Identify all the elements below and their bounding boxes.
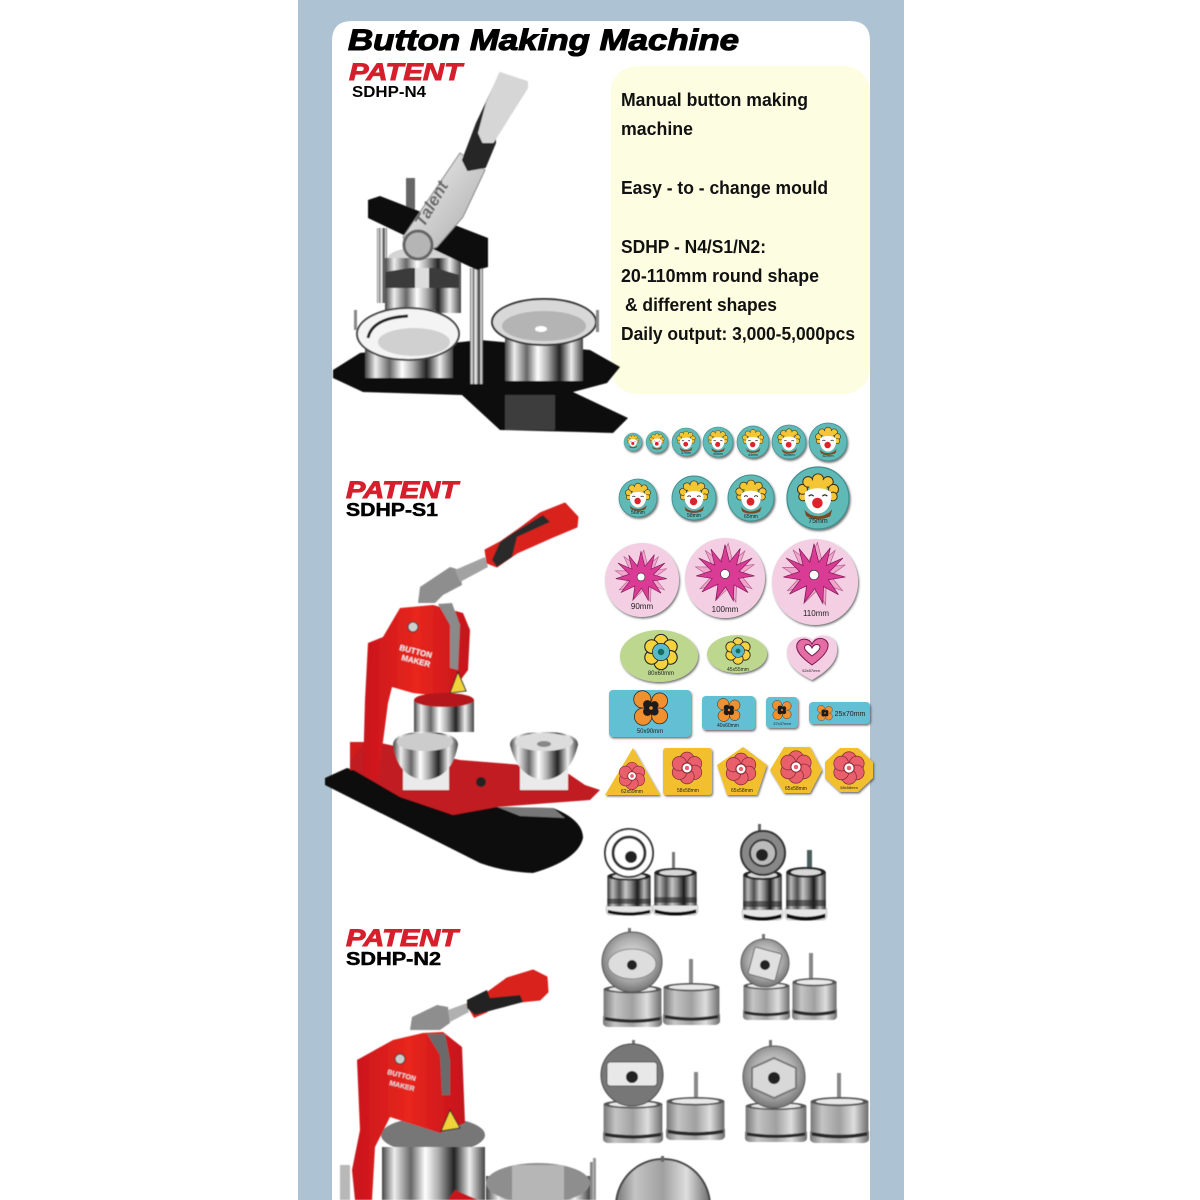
machine: SDHP-N4: [333, 73, 628, 433]
grey arm: [418, 567, 462, 603]
button 100mm: [685, 538, 765, 618]
row: yellow shaped buttons: [605, 747, 873, 795]
button 90mm: [605, 543, 679, 617]
title: Button Making Machine: [348, 24, 739, 57]
right post: [470, 268, 483, 384]
lower mould: [393, 732, 458, 790]
button octagon 58x58mm: [825, 748, 873, 792]
warning triangle: [441, 1110, 460, 1131]
mould set 7 partial: [593, 1156, 710, 1200]
spring screw: [406, 178, 415, 214]
button 90mm: 90mm: [631, 602, 653, 611]
row: rectangle buttons: [609, 690, 870, 737]
button 58mm: 58mm: [687, 513, 701, 519]
body link slot: [438, 603, 460, 670]
brand on arm: Talent: [411, 177, 453, 230]
mould set 1: [605, 829, 698, 915]
button 32mm: [646, 431, 668, 453]
button hexagon 65x58mm: [770, 747, 822, 793]
label: model SDHP-N4: SDHP-N4: [352, 84, 426, 101]
button 25mm: [624, 433, 642, 451]
mould set 3: [602, 928, 720, 1027]
feature: models: SDHP - N4/S1/N2:: [621, 237, 766, 257]
button square 58x58mm: [663, 748, 712, 795]
grey arm: [410, 1005, 450, 1030]
panel: features description: [611, 66, 870, 394]
upper mould: [382, 1147, 485, 1200]
button square 58x58mm: 58x58mm: [677, 788, 699, 794]
button hexagon 65x58mm: 65x58mm: [785, 786, 807, 792]
button 44mm: 44mm: [748, 453, 758, 457]
badge text line 2: MAKER: [389, 1080, 415, 1093]
badge text line 2: MAKER: [401, 653, 431, 669]
button triangle 62x59mm: 62x59mm: [621, 789, 643, 795]
black grip: [463, 85, 495, 170]
label: patent N4: PATENT: [349, 59, 465, 86]
button 80x60mm: [620, 630, 698, 682]
right mould bowl: [492, 299, 599, 381]
button 44mm: [737, 426, 769, 458]
button 75mm: 75mm: [808, 518, 828, 525]
grip: [485, 503, 578, 567]
label: model SDHP-N2: SDHP-N2: [346, 949, 441, 969]
mould set 2: [741, 824, 827, 921]
button 40mm: [703, 427, 733, 457]
feature: output: Daily output: 3,000-5,000pcs: [621, 324, 855, 344]
warning triangle: [450, 672, 466, 693]
button octagon 58x58mm: 58x58mm: [840, 785, 858, 790]
button 40x60mm: 40x60mm: [717, 723, 739, 729]
button 40x60mm: [702, 696, 755, 730]
red foot block: [350, 742, 378, 770]
button triangle 62x59mm: [605, 748, 660, 795]
button 50mm: [772, 425, 806, 459]
button 25x70mm: 25x70mm: [835, 711, 866, 718]
black base: [325, 768, 583, 873]
button 110mm: [772, 539, 858, 625]
button 45x55mm: 45x55mm: [727, 667, 749, 673]
feature: manual continued: machine: [621, 119, 693, 139]
row: oval and heart buttons: [620, 630, 837, 682]
label: model SDHP-S1: SDHP-S1: [346, 500, 438, 520]
button 100mm: 100mm: [712, 605, 739, 614]
grip red base: [466, 1004, 488, 1018]
button 110mm: 110mm: [803, 609, 829, 618]
heart button: 52x57mm: [802, 668, 820, 673]
pivot bolt: [408, 622, 418, 632]
mould stack: [385, 247, 461, 313]
grip red main: [485, 970, 548, 1008]
rod: [455, 557, 488, 582]
label: patent N2: PATENT: [346, 925, 461, 952]
button 56mm: [619, 479, 657, 517]
feature: round size: 20-110mm round shape: [621, 266, 819, 286]
black grip insert: [467, 990, 523, 1015]
base plate: [333, 340, 628, 433]
button 50x90mm: [609, 690, 691, 737]
right mould: [510, 732, 578, 790]
button pentagon 65x58mm: 65x58mm: [731, 788, 753, 794]
button 37x37mm: [766, 697, 798, 728]
machine: SDHP-N2: [340, 970, 593, 1200]
mould set 4: [741, 934, 837, 1020]
left post: [377, 228, 387, 303]
button 56mm: 56mm: [631, 510, 645, 516]
red plate: [350, 740, 600, 815]
top plate: [381, 1117, 485, 1153]
machine: SDHP-S1: [325, 503, 600, 873]
row: pink flower buttons: [605, 538, 858, 625]
row: small clown buttons: [624, 423, 847, 461]
button 37mm: 37mm: [681, 451, 691, 455]
light grip cap: [479, 73, 527, 142]
body link slot: [427, 1034, 450, 1095]
red body: [352, 1032, 465, 1200]
black grip insert: [492, 515, 550, 567]
button samples: [605, 423, 873, 795]
button 75mm: [787, 467, 849, 529]
silver arm: [403, 153, 485, 257]
button 52mm: [809, 423, 847, 461]
side clip: [340, 1165, 350, 1200]
blue background strip: [298, 0, 904, 1200]
row: medium clown buttons: [619, 467, 849, 529]
button 58mm: [672, 476, 716, 520]
button 65mm: 65mm: [744, 514, 758, 520]
heart button: [787, 635, 837, 680]
right bowl: [486, 1162, 593, 1200]
button 80x60mm: 80x60mm: [648, 671, 674, 677]
upper mould: [414, 693, 474, 732]
button 37mm: [672, 428, 700, 456]
button 65mm: [728, 475, 774, 521]
badge text: BUTTON: [399, 643, 433, 660]
button 25x70mm: [809, 702, 870, 724]
red body: [363, 605, 470, 780]
white content panel: [332, 21, 870, 1200]
black crossbar: [368, 196, 488, 270]
label: patent S1: PATENT: [346, 477, 461, 504]
mould set 5: [601, 1040, 725, 1143]
button 40mm: 40mm: [713, 452, 723, 456]
bolt: [476, 777, 486, 787]
feature: shapes: & different shapes: [625, 295, 777, 315]
mould set 6: [743, 1040, 869, 1143]
feature: mould: Easy - to - change mould: [621, 178, 828, 198]
feature: manual: Manual button making: [621, 90, 808, 110]
button pentagon 65x58mm: [717, 747, 767, 795]
button 37x37mm: 37x37mm: [773, 721, 791, 726]
button 45x55mm: [707, 635, 767, 673]
button 50mm: 50mm: [783, 452, 795, 457]
button 50x90mm: 50x90mm: [637, 729, 663, 735]
left mould bowl: [354, 308, 459, 378]
badge text: BUTTON: [387, 1069, 416, 1083]
mould sets: [593, 824, 869, 1200]
rod: [448, 1003, 469, 1022]
button 52mm: 52mm: [822, 453, 834, 458]
base reflection: [497, 807, 565, 818]
pivot: [404, 231, 432, 259]
lower red foot: [448, 1190, 478, 1200]
pivot bolt: [395, 1054, 405, 1064]
